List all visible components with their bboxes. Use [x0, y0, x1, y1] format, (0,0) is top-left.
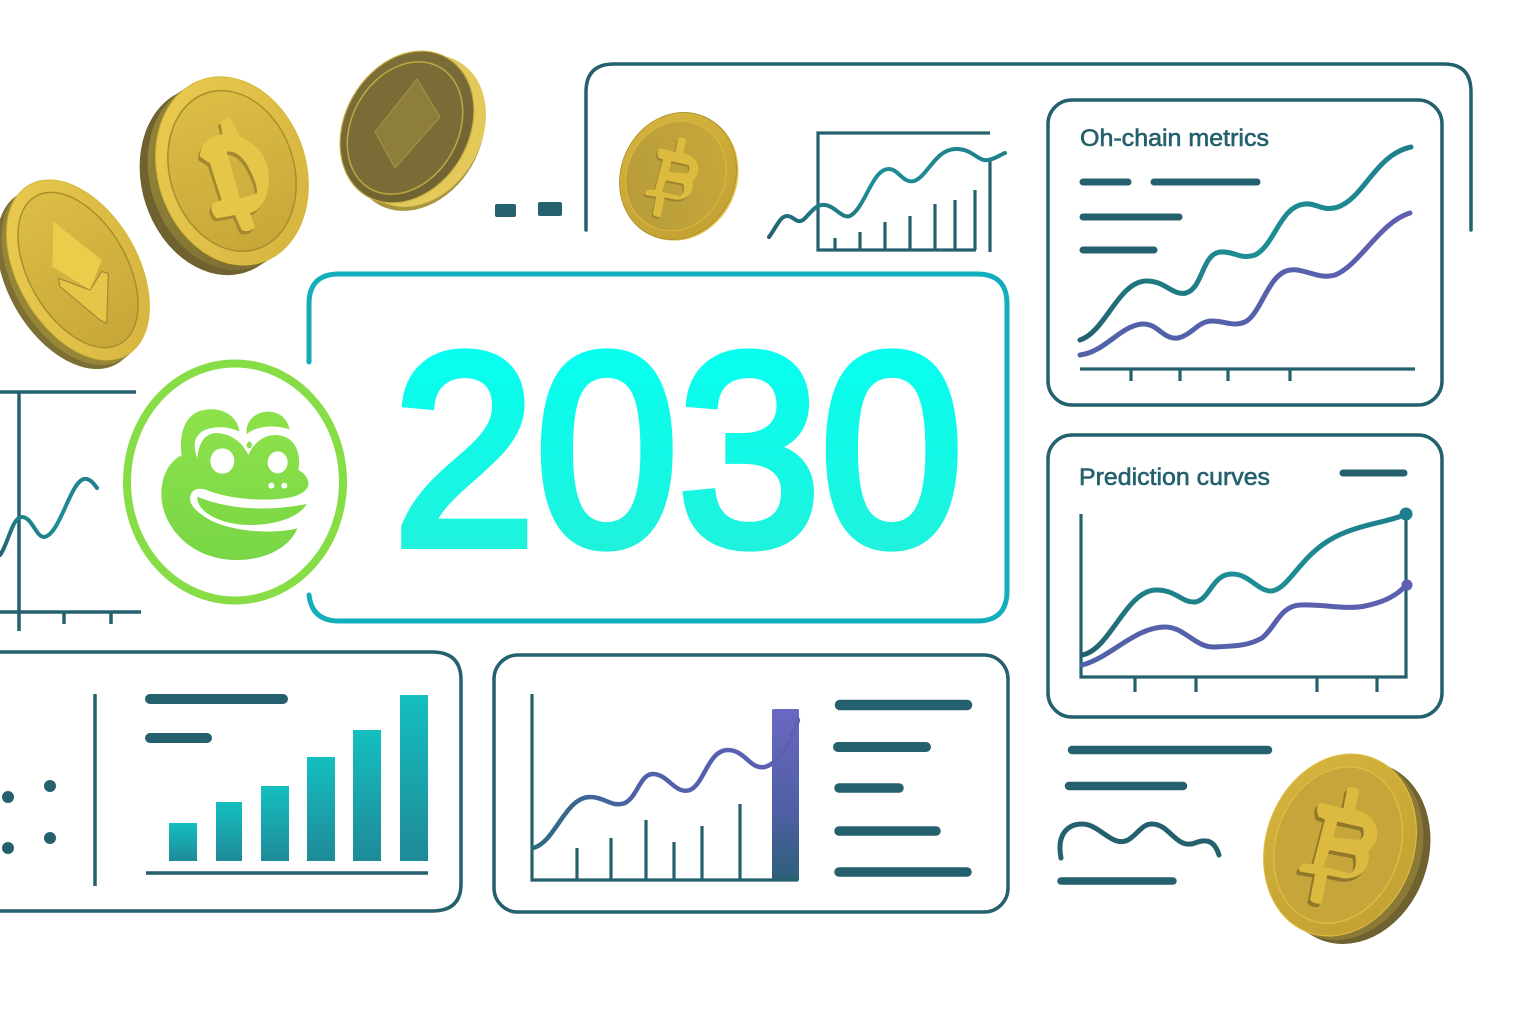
curve [533, 720, 798, 848]
headline number 2030: 2030 [393, 297, 963, 602]
icon: flat diamond [375, 79, 440, 168]
panel: prediction curves [1048, 435, 1442, 717]
icon: ethereum diamond [52, 222, 108, 323]
coin: large bitcoin [1239, 732, 1455, 966]
heading: prediction curves: Prediction curves [1079, 464, 1270, 491]
legend bar [1343, 470, 1404, 476]
heading bars [150, 699, 283, 738]
panel: top outer frame [586, 64, 1471, 230]
icon: bitcoin symbol [1296, 787, 1377, 907]
left chart line [0, 479, 97, 555]
axis and ticks [1080, 369, 1415, 381]
icon: crossed D symbol [198, 117, 269, 234]
dashes beside top panel [495, 202, 562, 217]
purple column [772, 709, 799, 881]
panel: central 2030 frame [309, 274, 1007, 621]
panel: bottom-middle chart [494, 655, 1008, 912]
purple forecast line [1082, 584, 1407, 665]
heading: on-chain metrics: Oh-chain metrics [1080, 125, 1269, 152]
bottom-right notes [1060, 750, 1268, 881]
coin: ethereum [0, 155, 179, 394]
legend bars [1083, 182, 1257, 250]
icon: bitcoin symbol small [644, 138, 698, 219]
squiggle line [1060, 824, 1219, 858]
purple trend line [1080, 213, 1410, 355]
axes and ticks [1081, 514, 1406, 692]
text placeholder bars [838, 705, 967, 872]
teal trend line [1080, 147, 1411, 340]
mini chart line [769, 149, 1005, 237]
bar chart [169, 695, 428, 861]
teal endpoint [1400, 508, 1412, 520]
panel: bottom-left bar chart [0, 652, 461, 911]
divider and dots [2, 694, 95, 886]
coin: dark diamond coin [313, 27, 513, 235]
panel: on-chain metrics [1048, 100, 1442, 405]
purple endpoint [1402, 580, 1412, 590]
left partial chart [0, 392, 141, 631]
teal forecast line [1082, 514, 1406, 655]
coin: small bitcoin [599, 93, 759, 260]
axes and thin bars [532, 694, 798, 880]
mini chart in top panel [769, 133, 1005, 252]
coin: stylised D coin [116, 57, 332, 295]
icon: frog logo [127, 364, 343, 600]
